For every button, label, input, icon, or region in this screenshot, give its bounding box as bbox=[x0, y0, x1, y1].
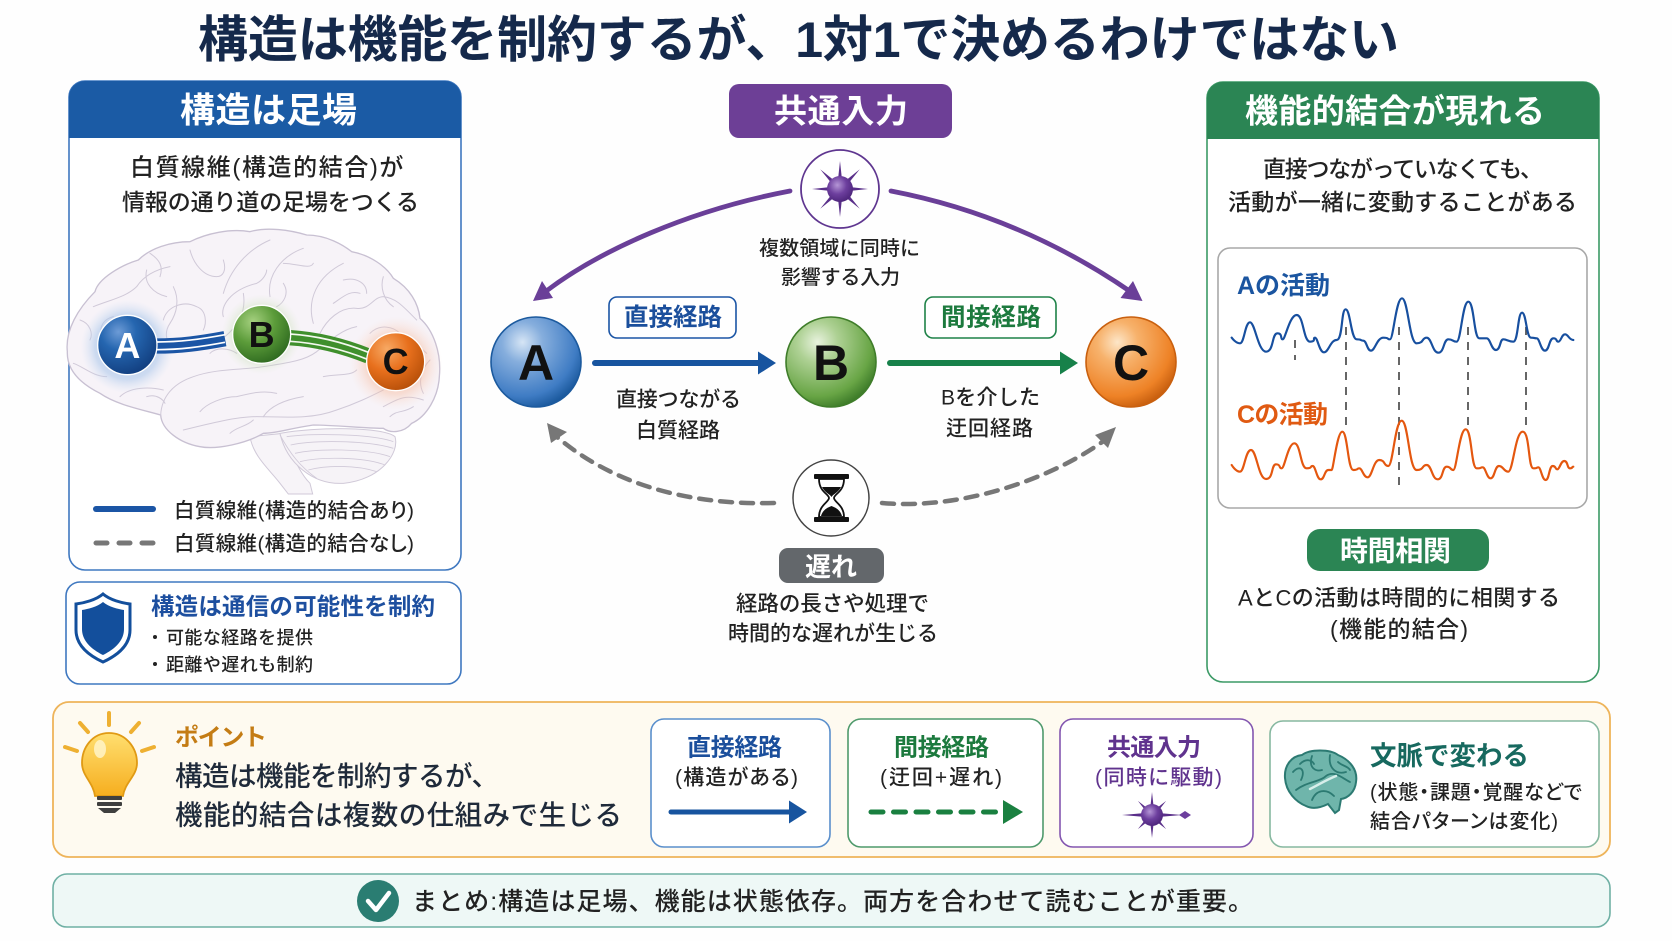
label: indirect path: 間接経路 bbox=[941, 304, 1042, 332]
card: indirect path: (迂回+遅れ) bbox=[880, 766, 1002, 790]
node B: B bbox=[813, 335, 849, 391]
card: context dependence bbox=[1270, 721, 1599, 847]
line: C activity bbox=[1232, 421, 1573, 480]
label: direct path bbox=[609, 297, 736, 338]
label: delay bbox=[779, 548, 884, 583]
text: white matter description: 白質線維(構造的結合)が bbox=[130, 154, 403, 182]
text: white matter description bbox=[122, 154, 419, 215]
text: white matter description: 情報の通り道の足場をつくる bbox=[122, 189, 419, 215]
callout bullets: 距離や遅れも制約 bbox=[166, 655, 313, 675]
text: common input description: 影響する入力 bbox=[781, 266, 900, 289]
label: temporal correlation bbox=[1307, 529, 1489, 571]
panel header: structure: 構造は足場 bbox=[180, 92, 357, 130]
arrow: direct bbox=[671, 800, 807, 824]
text: key message: 構造は機能を制約するが、 bbox=[175, 760, 499, 792]
text: correlation description: (機能的結合) bbox=[1330, 616, 1468, 642]
arrow: B to C bbox=[890, 352, 1078, 374]
legend: solid line: 白質線維(構造的結合あり) bbox=[174, 500, 414, 522]
callout: structure constrains communication bbox=[66, 582, 461, 684]
correlated peak markers bbox=[1295, 327, 1526, 488]
common input heading: 共通入力 bbox=[774, 92, 908, 130]
text: common input description: 複数領域に同時に bbox=[759, 237, 920, 260]
node A: A bbox=[518, 335, 554, 391]
callout bullets: 可能な経路を提供 bbox=[166, 628, 313, 648]
summary band bbox=[53, 874, 1610, 927]
arrow: common input to A bbox=[533, 191, 790, 301]
text: functional description bbox=[1228, 156, 1577, 215]
card: direct path bbox=[651, 719, 830, 847]
cerebrum bbox=[67, 229, 440, 448]
card: context dependence: 結合パターンは変化) bbox=[1370, 810, 1558, 833]
cerebellum bbox=[280, 429, 396, 483]
text: direct path note: 直接つながる bbox=[616, 388, 741, 412]
text: common input description bbox=[759, 237, 920, 289]
brain node A: A bbox=[114, 325, 140, 366]
panel header: functional bbox=[1207, 82, 1599, 139]
card: common input: 共通入力 bbox=[1107, 734, 1201, 762]
text: indirect path note: Bを介した bbox=[941, 386, 1040, 410]
card: context dependence: 文脈で変わる bbox=[1370, 741, 1529, 771]
label: C activity: Cの活動 bbox=[1237, 401, 1328, 429]
text: delay description: 時間的な遅れが生じる bbox=[728, 622, 938, 646]
card: common input bbox=[1060, 719, 1253, 847]
chart: activity time series bbox=[1218, 248, 1587, 508]
text: indirect path note: 迂回経路 bbox=[946, 418, 1033, 440]
icon: hourglass bbox=[793, 460, 869, 536]
common input heading bbox=[729, 84, 952, 138]
label: indirect path bbox=[925, 297, 1056, 338]
card: indirect path bbox=[848, 719, 1043, 847]
brain node B: B bbox=[249, 314, 275, 355]
brain node C bbox=[367, 333, 425, 391]
panel header: structure bbox=[69, 81, 461, 138]
card: direct path: (構造がある) bbox=[675, 766, 798, 790]
text: functional description: 直接つながっていなくても、 bbox=[1263, 156, 1543, 182]
node B bbox=[786, 317, 876, 407]
text: delay description: 経路の長さや処理で bbox=[736, 592, 929, 616]
card: common input: (同時に駆動) bbox=[1095, 766, 1222, 790]
brain node B bbox=[233, 305, 291, 363]
icon: shield bbox=[76, 594, 130, 662]
callout heading: 構造は通信の可能性を制約 bbox=[151, 594, 435, 620]
arrow: common input to C bbox=[891, 191, 1142, 301]
fibers B to C bbox=[290, 334, 368, 360]
summary text: まとめ:構造は足場、機能は状態依存。両方を合わせて読むことが重要。 bbox=[412, 888, 1253, 916]
icon: neuron bbox=[1122, 792, 1191, 838]
text: direct path note: 白質経路 bbox=[636, 420, 720, 442]
line: A activity bbox=[1232, 298, 1573, 353]
icon: check mark bbox=[357, 880, 399, 922]
arrow: indirect dashed bbox=[871, 800, 1023, 824]
panel: structure is scaffold bbox=[67, 81, 461, 570]
icon: common input neuron bbox=[801, 150, 879, 228]
label: point: ポイント bbox=[175, 724, 267, 752]
legend: dashed line: 白質線維(構造的結合なし) bbox=[174, 532, 414, 556]
arrow: delay to C bbox=[882, 427, 1116, 504]
activity glows bbox=[81, 294, 442, 410]
label: delay: 遅れ bbox=[805, 552, 857, 582]
text: key message: 機能的結合は複数の仕組みで生じる bbox=[175, 800, 622, 830]
label: A activity: Aの活動 bbox=[1237, 272, 1330, 300]
text: key message bbox=[175, 760, 622, 830]
brain node A bbox=[98, 315, 157, 375]
card: direct path: 直接経路 bbox=[687, 734, 782, 762]
label: temporal correlation: 時間相関 bbox=[1340, 536, 1451, 566]
title: 構造は機能を制約するが、1対1で決めるわけではない bbox=[198, 12, 1399, 68]
text: correlation description: AとCの活動は時間的に相関する bbox=[1238, 586, 1560, 610]
panel: key point band bbox=[53, 702, 1610, 857]
text: indirect path note bbox=[941, 386, 1040, 440]
card: indirect path: 間接経路 bbox=[894, 734, 989, 762]
text: correlation description bbox=[1238, 586, 1560, 642]
callout bullets bbox=[153, 628, 313, 675]
brain stem bbox=[250, 433, 313, 494]
text: delay description bbox=[728, 592, 938, 646]
arrow: A to B bbox=[595, 352, 776, 374]
card: context dependence: (状態・課題・覚醒などで bbox=[1370, 781, 1582, 804]
brain node C: C bbox=[383, 341, 409, 382]
panel header: functional: 機能的結合が現れる bbox=[1245, 92, 1545, 130]
text: direct path note bbox=[616, 388, 741, 442]
panel: functional connectivity bbox=[1207, 82, 1599, 682]
text: functional description: 活動が一緒に変動することがある bbox=[1228, 189, 1577, 215]
node A bbox=[491, 317, 581, 407]
icon: light bulb bbox=[65, 713, 154, 813]
icon: teal brain bbox=[1285, 750, 1356, 813]
panel: network diagram bbox=[491, 84, 1176, 646]
node C: C bbox=[1113, 335, 1149, 391]
gyri lines bbox=[73, 240, 430, 433]
legend bbox=[96, 500, 414, 556]
node C bbox=[1086, 317, 1176, 407]
brain illustration bbox=[67, 229, 442, 494]
arrow: delay to A bbox=[547, 423, 774, 503]
fibers A to B bbox=[157, 335, 225, 350]
label: direct path: 直接経路 bbox=[624, 304, 722, 332]
